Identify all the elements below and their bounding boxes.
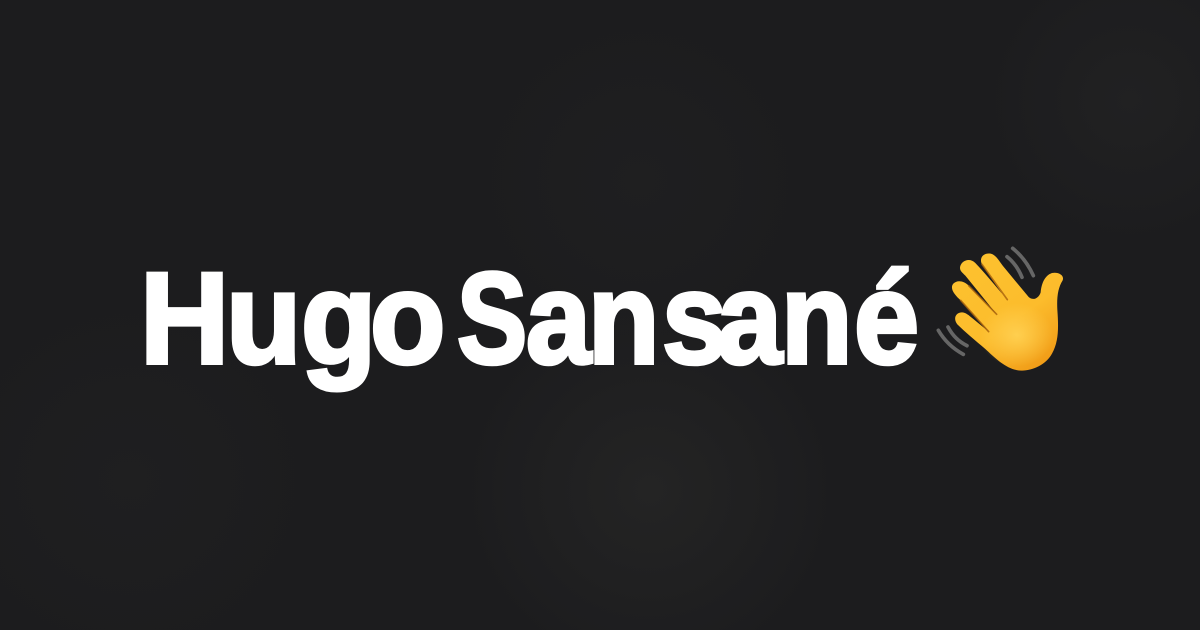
- title: ansané: [526, 246, 919, 391]
- icon: waving hand: [936, 246, 1063, 371]
- title: S: [457, 247, 527, 392]
- title: Hugo: [140, 245, 445, 391]
